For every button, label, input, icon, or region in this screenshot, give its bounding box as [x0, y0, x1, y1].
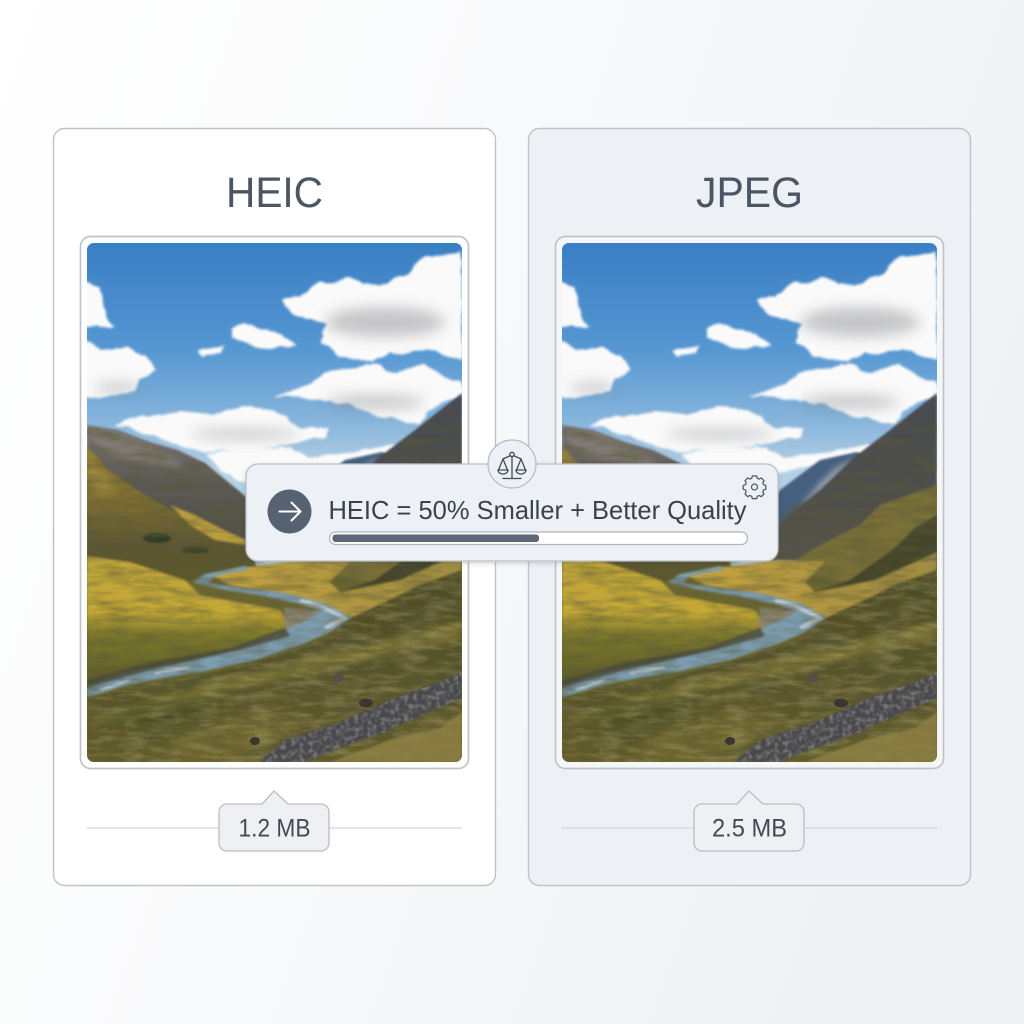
JPEG size badge: 2.5 MB	[712, 814, 787, 842]
JPEG card	[528, 128, 970, 886]
HEIC heading: HEIC	[226, 169, 323, 217]
HEIC card	[54, 128, 496, 886]
icon: arrow in circle	[268, 490, 312, 534]
JPEG size badge	[694, 791, 804, 851]
panel: HEIC	[54, 128, 496, 886]
JPEG size divider	[562, 827, 937, 829]
HEIC landscape photo	[80, 243, 462, 762]
callout: comparison summary	[246, 440, 778, 561]
panel: JPEG	[528, 128, 970, 886]
callout panel	[246, 464, 778, 561]
HEIC photo frame	[80, 236, 468, 768]
callout text: HEIC = 50% Smaller + Better Quality	[328, 495, 746, 525]
progress bar	[330, 532, 748, 544]
JPEG heading: JPEG	[696, 169, 803, 217]
JPEG landscape photo	[555, 243, 937, 762]
HEIC size badge: 1.2 MB	[238, 814, 310, 842]
HEIC size badge	[219, 791, 329, 851]
icon: balance scales	[488, 440, 536, 488]
icon: gear	[743, 476, 766, 499]
HEIC size divider	[87, 827, 462, 829]
JPEG photo frame	[556, 236, 944, 768]
